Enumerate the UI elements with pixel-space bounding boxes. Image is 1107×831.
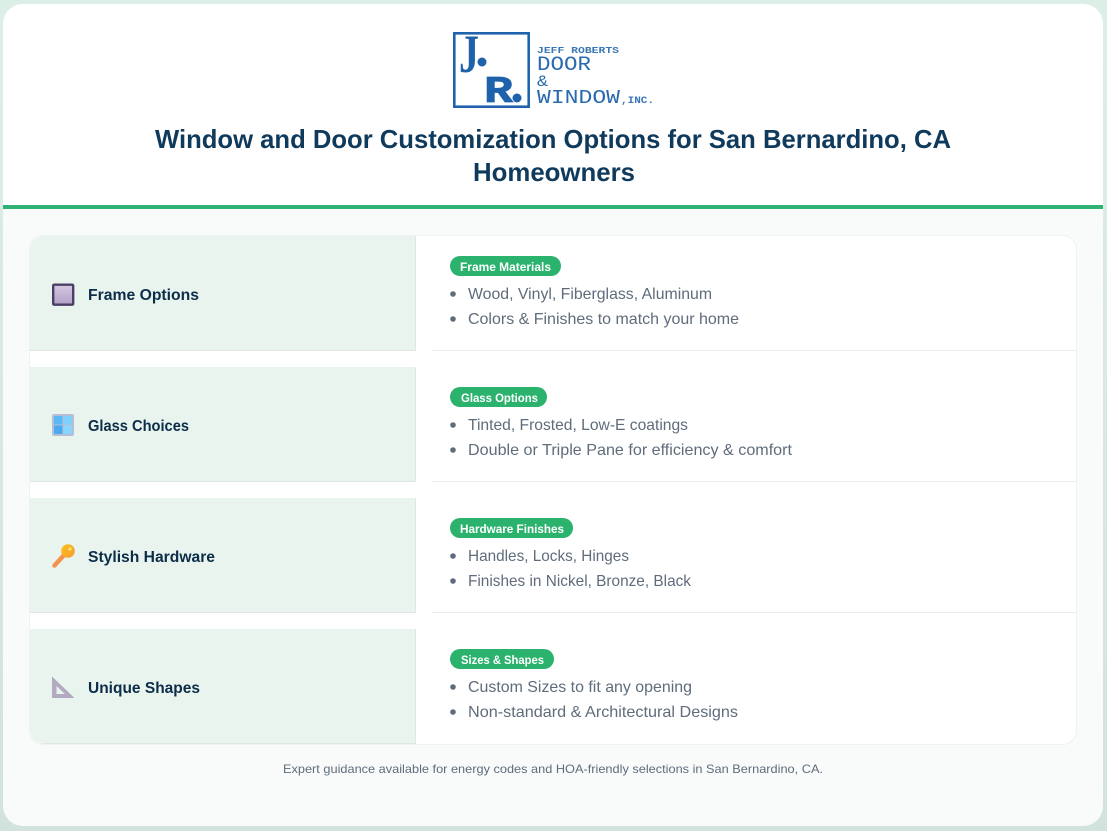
icon: frame xyxy=(53,285,73,305)
list: frame options: Wood, Vinyl, Fiberglass, Aluminum xyxy=(468,286,712,303)
heading: frame options: Frame Options xyxy=(88,287,199,304)
title: Window and Door Customization Options for San Bernardino, CA xyxy=(155,124,951,154)
badge: frame materials: Frame Materials xyxy=(460,260,551,274)
panel: frame options xyxy=(30,236,1076,351)
logo: ,INC. xyxy=(621,96,654,107)
badge: frame materials xyxy=(450,256,561,276)
list: hardware finishes: Finishes in Nickel, Bronze, Black xyxy=(468,573,692,590)
badge: glass options: Glass Options xyxy=(461,391,538,405)
logo: & xyxy=(537,73,548,91)
list: sizes and shapes xyxy=(450,679,738,721)
list: glass options: Double or Triple Pane for efficiency & comfort xyxy=(468,442,793,459)
badge: sizes and shapes xyxy=(450,649,554,669)
title xyxy=(155,124,951,187)
logo: DOOR xyxy=(537,54,591,77)
logo: WINDOW xyxy=(537,87,621,109)
logo: J xyxy=(459,24,479,84)
list: frame options: Colors & Finishes to match your home xyxy=(468,311,739,328)
list: sizes and shapes: Non-standard & Architectural Designs xyxy=(468,704,738,721)
list: glass options: Tinted, Frosted, Low-E coatings xyxy=(468,417,688,434)
list: hardware finishes: Handles, Locks, Hinges xyxy=(468,548,629,565)
logo: R xyxy=(484,71,513,114)
icon: triangle ruler xyxy=(52,676,74,698)
badge: hardware finishes: Hardware Finishes xyxy=(460,522,564,536)
heading: stylish hardware: Stylish Hardware xyxy=(88,549,215,566)
footer note: Expert guidance available for energy codes and HOA-friendly selections in San Bernardino, CA. xyxy=(283,762,823,776)
title: Homeowners xyxy=(473,157,635,187)
heading: unique shapes: Unique Shapes xyxy=(88,680,200,697)
badge: glass options xyxy=(450,387,547,407)
panel: stylish hardware xyxy=(30,498,1076,613)
panel: unique shapes xyxy=(30,629,416,744)
badge: sizes and shapes: Sizes & Shapes xyxy=(461,653,544,667)
icon: window glass xyxy=(52,414,74,436)
logo xyxy=(454,24,654,114)
logo: JEFF ROBERTS xyxy=(537,45,619,56)
header xyxy=(3,4,1103,209)
list: glass options xyxy=(450,417,793,459)
list: sizes and shapes: Custom Sizes to fit any opening xyxy=(468,679,692,696)
icon: key xyxy=(54,544,75,566)
options table xyxy=(30,236,1076,744)
heading: glass choices: Glass Choices xyxy=(88,418,189,435)
badge: hardware finishes xyxy=(450,518,573,538)
list: frame options xyxy=(450,286,739,328)
list: hardware finishes xyxy=(450,548,692,590)
panel: glass choices xyxy=(30,367,1076,482)
